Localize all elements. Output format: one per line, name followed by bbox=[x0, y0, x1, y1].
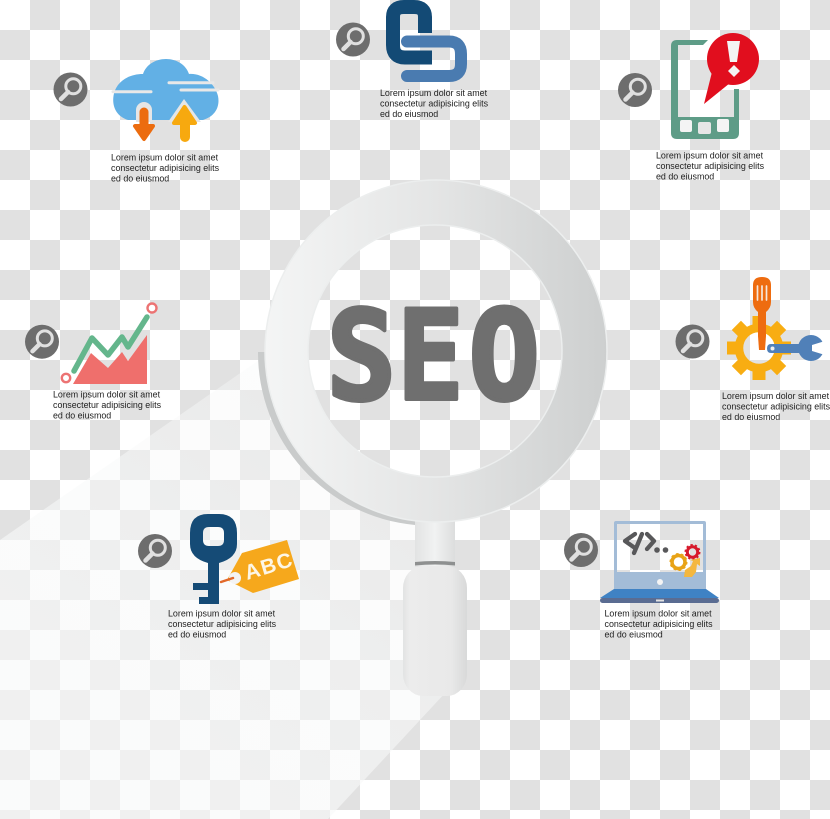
SEO heading: E bbox=[397, 284, 464, 429]
item: cloud bbox=[54, 59, 220, 184]
caption: ed do eiusmod bbox=[168, 630, 226, 640]
icon: laptop with code and gears bbox=[600, 521, 719, 603]
search badge bbox=[25, 325, 59, 359]
caption: ed do eiusmod bbox=[656, 172, 714, 182]
caption: consectetur adipisicing elits bbox=[380, 98, 489, 108]
caption: ed do eiusmod bbox=[722, 412, 780, 422]
caption: Lorem ipsum dolor sit amet bbox=[168, 608, 276, 618]
icon: gear, screwdriver and wrench bbox=[727, 277, 825, 380]
magnifier neck bbox=[415, 515, 455, 567]
SEO heading: O bbox=[469, 283, 540, 429]
magnifier handle bbox=[403, 566, 467, 696]
search badge bbox=[336, 22, 370, 56]
search badge bbox=[54, 72, 88, 106]
magnifier collar line bbox=[415, 561, 455, 566]
SEO heading bbox=[326, 283, 540, 429]
caption: consectetur adipisicing elits bbox=[168, 619, 277, 629]
search badge bbox=[138, 534, 172, 568]
caption: consectetur adipisicing elits bbox=[111, 163, 220, 173]
caption: Lorem ipsum dolor sit amet bbox=[380, 88, 488, 98]
caption: ed do eiusmod bbox=[604, 630, 663, 640]
search badge bbox=[676, 324, 710, 358]
caption: Lorem ipsum dolor sit amet bbox=[656, 150, 764, 160]
item: keyword key bbox=[138, 514, 299, 640]
icon: phone with alert bubble bbox=[671, 33, 759, 139]
search badge bbox=[564, 533, 598, 567]
item: growth chart bbox=[25, 304, 162, 420]
item: laptop bbox=[564, 521, 719, 640]
caption: consectetur adipisicing elits bbox=[722, 402, 830, 412]
SEO heading: S bbox=[326, 284, 396, 429]
item: link bbox=[336, 7, 489, 119]
magnifier rim shadow bbox=[258, 352, 420, 525]
icon: growth chart bbox=[62, 304, 156, 384]
icon: chain link bbox=[393, 7, 461, 76]
caption: Lorem ipsum dolor sit amet bbox=[53, 390, 161, 400]
icon: key with ABC tag bbox=[190, 514, 299, 604]
search badge bbox=[618, 73, 652, 107]
tag label: ABC bbox=[242, 548, 296, 585]
caption: ed do eiusmod bbox=[111, 174, 169, 184]
caption: consectetur adipisicing elits bbox=[656, 161, 765, 171]
item: phone alert bbox=[618, 33, 765, 182]
caption: consectetur adipisicing elits bbox=[604, 619, 713, 629]
caption: Lorem ipsum dolor sit amet bbox=[604, 608, 712, 618]
caption: ed do eiusmod bbox=[380, 109, 438, 119]
item: tools bbox=[676, 277, 830, 422]
magnifying glass bbox=[258, 180, 607, 696]
light beam from magnifier bbox=[0, 352, 446, 819]
caption: Lorem ipsum dolor sit amet bbox=[111, 152, 219, 162]
caption: ed do eiusmod bbox=[53, 410, 111, 420]
magnifier ring bbox=[265, 180, 607, 522]
icon: cloud with arrows bbox=[113, 59, 218, 139]
caption: Lorem ipsum dolor sit amet bbox=[722, 391, 830, 401]
caption: consectetur adipisicing elits bbox=[53, 400, 162, 410]
